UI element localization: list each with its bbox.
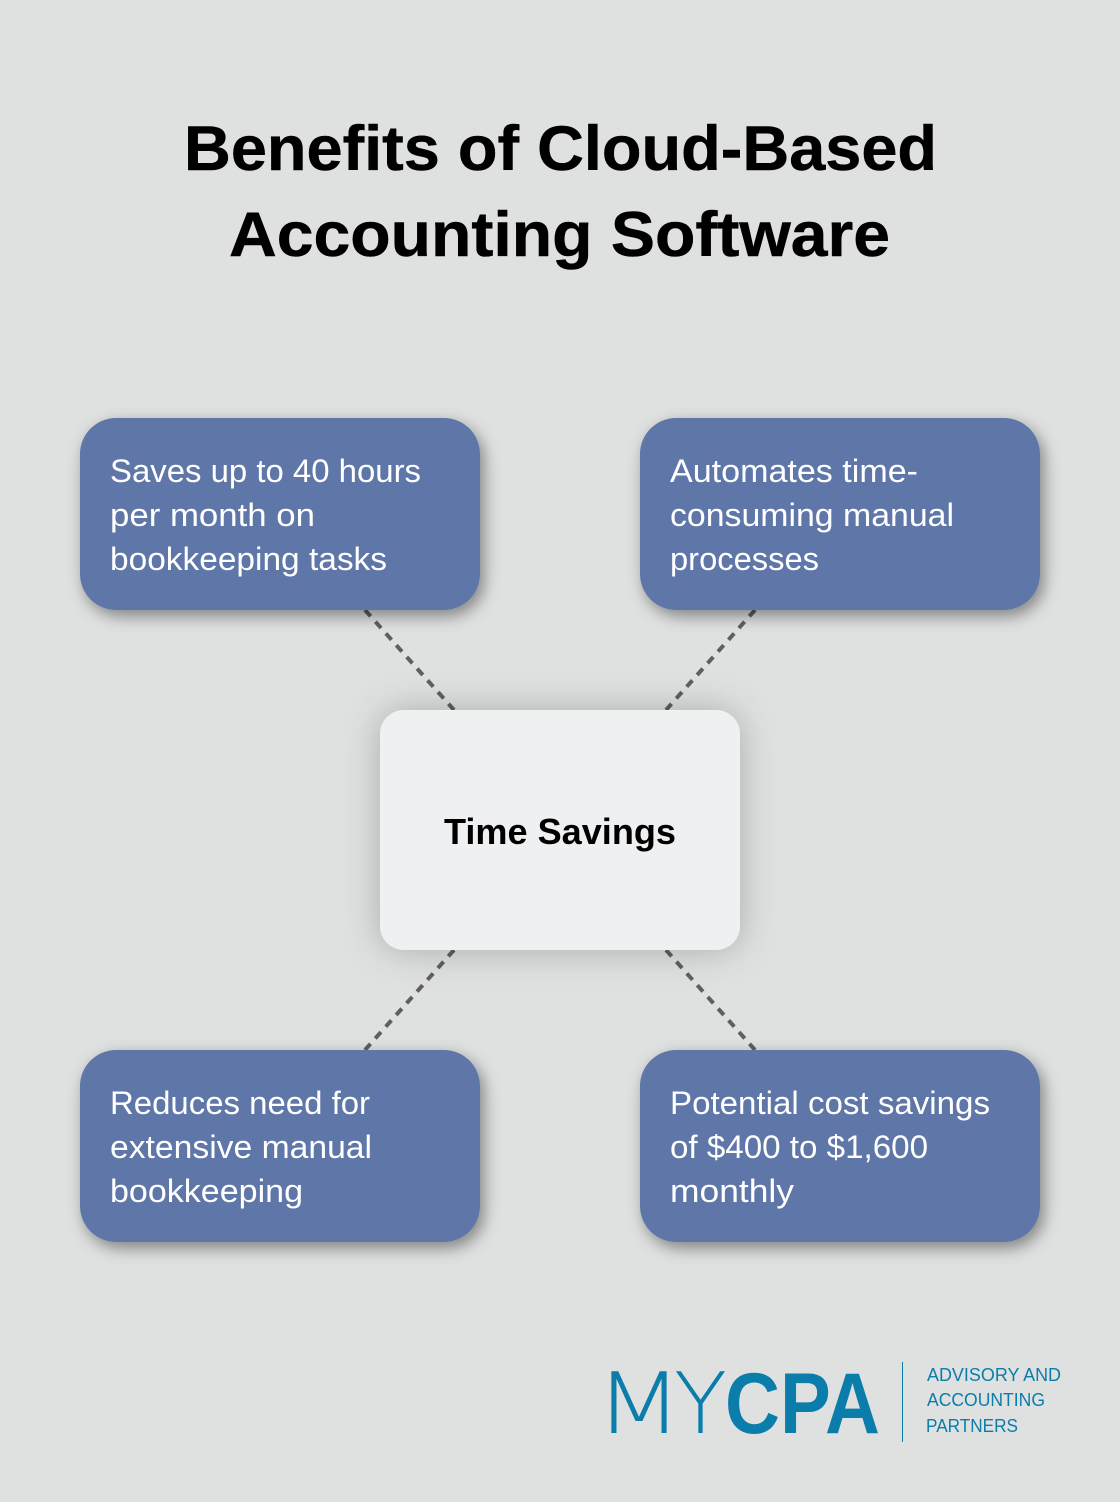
panel: automates processes: Automates time- [670,453,918,489]
panel: reduces bookkeeping: Reduces need for [110,1085,370,1121]
panel: center time savings: Time Savings [444,811,676,852]
panel: saves hours: bookkeeping tasks [110,541,387,577]
logo: MYCPA: ADVISORY AND [927,1364,1061,1385]
panel: saves hours [80,418,480,610]
panel: automates processes [640,418,1040,610]
panel: automates processes: consuming manual [670,497,954,533]
panel: saves hours: Saves up to 40 hours [110,453,421,489]
panel: cost savings: monthly [670,1173,794,1209]
panel: cost savings: of $400 to $1,600 [670,1129,928,1165]
logo: MYCPA: M [595,1355,683,1454]
title: Accounting Software [229,200,890,270]
panel: reduces bookkeeping: bookkeeping [110,1173,303,1209]
logo: MYCPA: PARTNERS [926,1415,1018,1436]
title [184,114,937,270]
panel: reduces bookkeeping: extensive manual [110,1129,372,1165]
panel: cost savings [640,1050,1040,1242]
logo: MYCPA: Y [674,1355,727,1454]
dashed connectors [365,610,755,1050]
logo: MYCPA [595,1355,1061,1454]
panel: reduces bookkeeping [80,1050,480,1242]
panel: cost savings: Potential cost savings [670,1085,990,1121]
panel: center time savings [380,710,740,950]
title: Benefits of Cloud-Based [184,114,937,184]
panel: saves hours: per month on [110,497,315,533]
panel: automates processes: processes [670,541,819,577]
logo: MYCPA: CPA [725,1356,880,1452]
logo: MYCPA: ACCOUNTING [927,1389,1045,1410]
